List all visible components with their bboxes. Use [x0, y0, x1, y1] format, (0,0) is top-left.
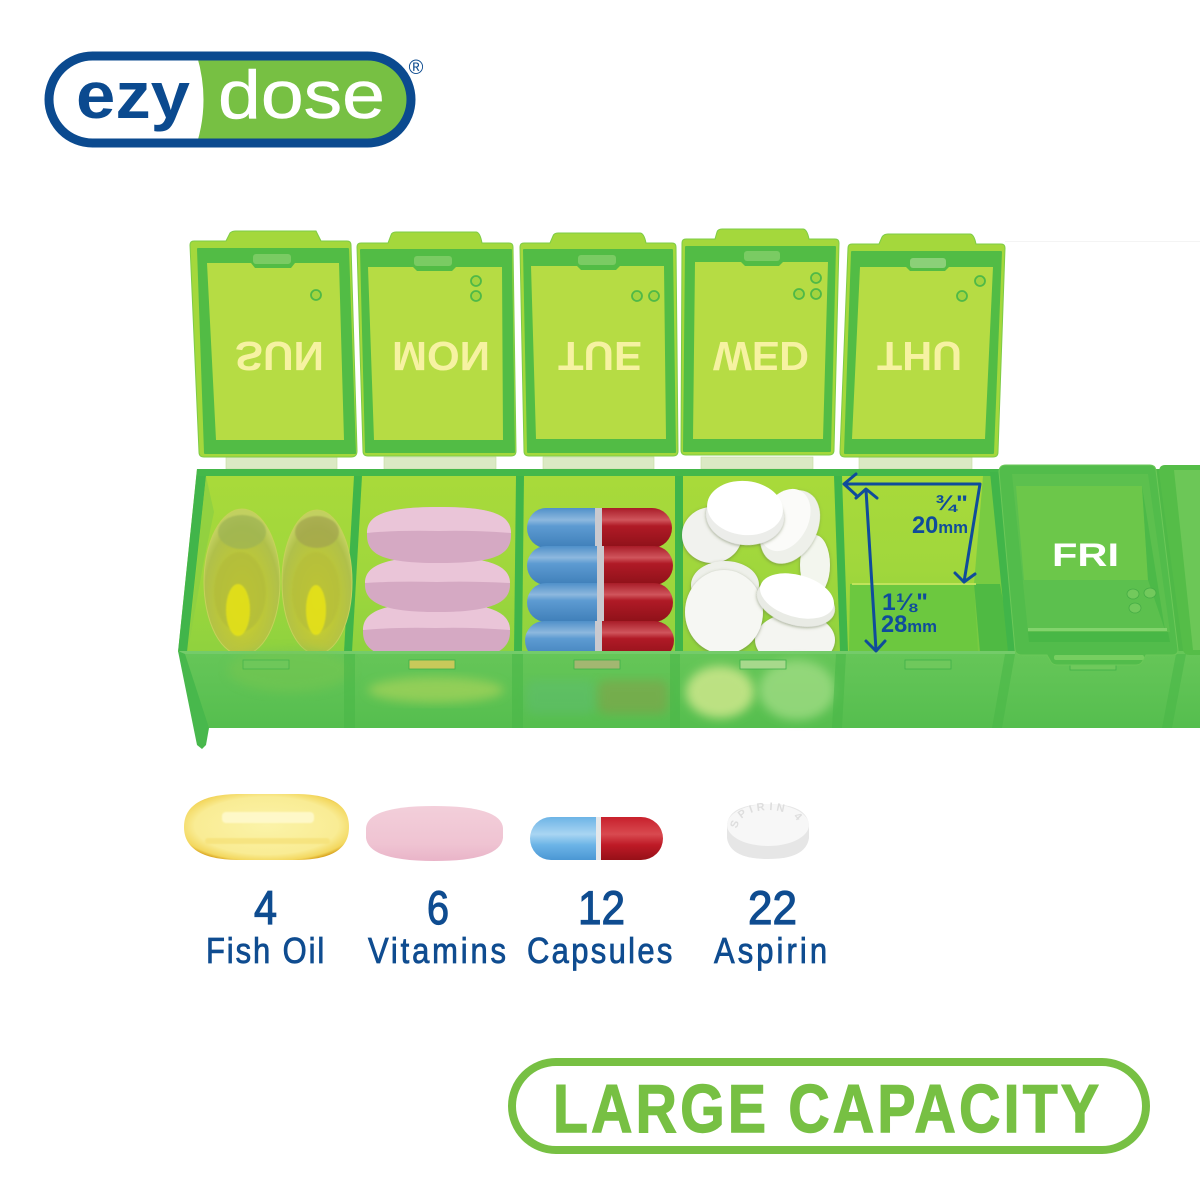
- hinges: [226, 457, 972, 469]
- icon: fish oil softgel: [184, 794, 349, 860]
- count: 4: 4: [254, 881, 277, 934]
- FRI label: FRI: [1052, 537, 1119, 573]
- lid: WED: [681, 229, 839, 455]
- tray front wall: [178, 651, 1200, 728]
- lid: TUE: [520, 233, 678, 456]
- pill box tray: [178, 469, 1200, 749]
- depth arrows: [844, 474, 980, 651]
- logo: ezy dose: [49, 56, 424, 143]
- lid: SUN: SUN: [235, 333, 324, 379]
- measurement arrows and labels: [844, 474, 980, 651]
- logo green half: [197, 56, 410, 143]
- front clip tabs: [243, 660, 1116, 670]
- label: 3/4 inch: ¾": [935, 492, 968, 515]
- legend: fish oil: [184, 794, 349, 972]
- badge: large capacity: [512, 1062, 1146, 1150]
- compartment dividers: [344, 476, 362, 652]
- fish oil capsules in tray: [204, 509, 352, 655]
- label: Aspirin: Aspirin: [714, 932, 827, 972]
- closed lid: FRI: [999, 465, 1178, 665]
- badge text: LARGE CAPACITY: [553, 1071, 1099, 1147]
- lid: SUN: [190, 231, 357, 457]
- logo pill background: [49, 56, 411, 143]
- label: Vitamins: Vitamins: [368, 932, 506, 972]
- aspirin tablets in tray: [680, 480, 836, 651]
- left wall: [178, 469, 206, 652]
- legend: vitamins: [366, 806, 506, 972]
- front rim highlight: [180, 651, 1015, 654]
- badge outline: [512, 1062, 1146, 1150]
- logo word ezy: ezy: [76, 58, 190, 132]
- closed lid: SAT (partial): [1159, 465, 1200, 655]
- capsules in tray: [525, 508, 674, 660]
- label: Capsules: Capsules: [527, 932, 672, 972]
- vitamin tablets in tray: [363, 507, 511, 661]
- icon: blue and red capsule: [530, 817, 663, 860]
- icon: aspirin tablet: [727, 802, 809, 859]
- front dividers: [344, 654, 1186, 728]
- lid: THU: THU: [877, 333, 962, 379]
- count: 12: 12: [578, 881, 625, 934]
- lid: MON: [357, 232, 516, 456]
- logo outline: [49, 56, 411, 143]
- legend: aspirin: [714, 802, 827, 972]
- left edge and spike: [178, 651, 209, 749]
- top rim: [197, 469, 1000, 476]
- logo word dose: dose: [218, 57, 385, 133]
- lid: WED: WED: [713, 333, 809, 379]
- legend: capsules: [527, 817, 672, 972]
- label: 28 mm: 28mm: [881, 611, 937, 638]
- lid: THU: [840, 234, 1005, 457]
- braille bumps: [1127, 588, 1156, 613]
- reflections through the front wall: [228, 648, 835, 720]
- registered mark: ®: [409, 57, 424, 79]
- label: 20 mm: 20mm: [912, 512, 968, 539]
- count: 6: 6: [427, 881, 449, 934]
- lid: TUE: TUE: [558, 333, 642, 379]
- icon: vitamin tablet: [366, 806, 503, 861]
- count: 22: 22: [748, 881, 797, 934]
- label: Fish Oil: Fish Oil: [206, 932, 324, 972]
- empty Thursday compartment: [849, 476, 1012, 652]
- tray interior: [178, 469, 1020, 652]
- icon: aspirin tablet: SPIRIN 4: [730, 802, 802, 828]
- label: 1 1/8 inch: 1⅛": [882, 589, 928, 616]
- lid: MON: MON: [392, 333, 490, 379]
